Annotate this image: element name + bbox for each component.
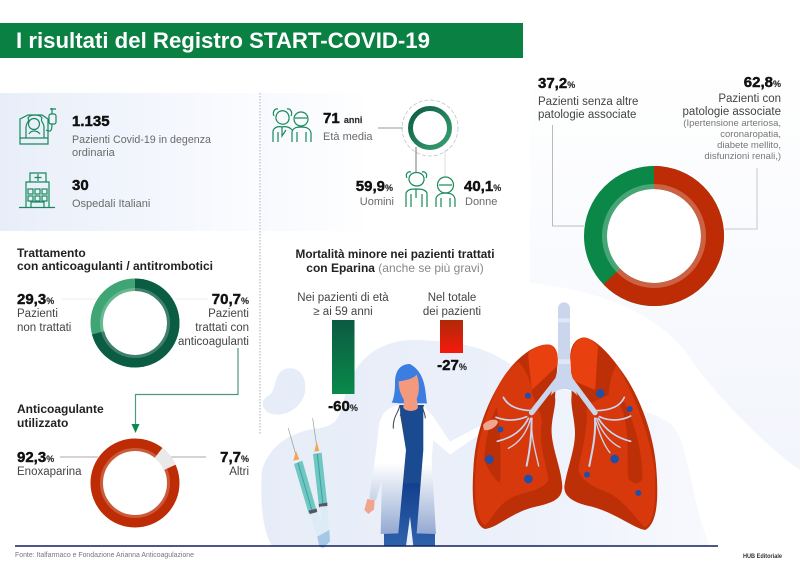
stat: treated: 70,7% [212,291,249,308]
stat: hospitals: Ospedali Italiani [72,198,150,210]
stat: with comorbidities: disfunzioni renali,) [704,151,781,162]
bar: patients over 59: ≥ ai 59 anni [313,306,373,318]
stat: men [356,178,394,208]
icon: woman [436,177,455,207]
heading: treatment [17,246,213,273]
stat: others [220,449,249,478]
heading: anticoagulant: Anticoagulante [17,402,104,416]
stat: treated [178,291,249,348]
bar: all patients: Nel totale [428,292,476,304]
illustration: doctor hand over lung [483,420,498,430]
stat: untreated: Pazienti [17,308,58,320]
stat: no comorbidities: Pazienti senza altre [538,96,638,108]
panel: top right background [530,68,800,470]
heading: treatment: Trattamento [17,246,86,260]
stat: no comorbidities [538,75,638,121]
bar: all patients: dei pazienti [423,306,481,318]
panel: hospital numbers [0,93,260,231]
stat: with comorbidities: coronaropatia, [720,129,781,140]
stat: treated: Pazienti [208,308,249,320]
icon: patient in bed [20,108,56,144]
heading: mortality [296,247,494,275]
title banner: I risultati del Registro START-COVID-19 [16,28,430,53]
icon: man [406,172,427,207]
stat: others: 7,7% [220,449,249,466]
panel: comorbidities [538,74,781,294]
illustration: lungs [473,308,657,530]
stat: treated: trattati con [195,322,249,334]
stat: treated: anticoagulanti [178,336,249,348]
stat: men: 59,9% [356,178,393,195]
nodules [485,389,641,496]
stat: hospitals [72,177,150,210]
chart: comorbidities donut [596,178,712,294]
icon: elderly couple [273,109,311,142]
stat: no comorbidities: patologie associate [538,109,636,121]
bar: all patients: -27% [437,357,467,374]
heading: treatment: con anticoagulanti / antitrombotici [17,259,213,273]
bar: all patients [423,292,481,374]
stat: mean age [323,110,373,143]
stat: with comorbidities: patologie associate [683,106,781,118]
stat: others: Altri [229,466,249,478]
stat: untreated: non trattati [17,322,71,334]
stat: women [464,178,501,208]
stat: with comorbidities: 62,8% [744,74,781,91]
heading: mortality: Mortalità minore nei pazienti trattati [296,247,494,261]
decorative blob [263,368,305,415]
illustration: doctor [364,364,499,546]
bar: patients over 59: Nei pazienti di età [297,292,389,304]
arrow: treated to anticoagulant [132,348,238,433]
panel: age background [261,93,371,231]
stat: women: Donne [465,196,497,208]
credit: HUB Editoriale [743,553,782,560]
panel: illustration background [261,340,710,546]
panel: age and sex [273,100,501,208]
stat: enoxaparin: Enoxaparina [17,466,82,478]
bar: patients over 59: -60% [328,398,358,415]
chart: treatment donut [97,285,173,361]
stat: with comorbidities: diabete mellito, [717,140,781,151]
stat: with comorbidities: (Ipertensione arteriosa, [683,118,781,129]
panel: mortality [296,247,494,415]
icon: hospital [19,173,55,208]
stat: hospitals: 30 [72,177,89,194]
stat: men: Uomini [360,196,394,208]
stat: with comorbidities: Pazienti con [718,93,781,105]
source note: Fonte: Italfarmaco e Fondazione Arianna Anticoagulazione [15,552,194,559]
stat: enoxaparin: 92,3% [17,449,54,466]
bar: patients over 59 [297,292,389,415]
stat: with comorbidities [683,74,781,162]
airways [496,308,631,466]
illustration: syringes [288,418,330,548]
chart: age ring [402,100,458,156]
right lung [564,337,657,530]
heading: anticoagulant [17,402,104,430]
heading: anticoagulant: utilizzato [17,416,68,430]
stat: patients: Pazienti Covid-19 in degenza [72,134,212,146]
stat: patients [72,113,212,159]
left lung [473,345,562,529]
stat: patients: 1.135 [72,113,110,130]
stat: mean age: 71 anni [323,110,362,127]
title banner [0,23,523,58]
stat: mean age: Età media [323,131,373,143]
stat: patients: ordinaria [72,147,116,159]
heading: mortality: con Eparina (anche se più gravi) [306,261,484,275]
stat: untreated: 29,3% [17,291,54,308]
stat: no comorbidities: 37,2% [538,75,575,92]
chart: anticoagulant donut [81,429,189,537]
stat: women: 40,1% [464,178,501,195]
stat: enoxaparin [17,449,82,478]
stat: untreated [17,291,71,334]
panel: treatment [17,246,249,537]
